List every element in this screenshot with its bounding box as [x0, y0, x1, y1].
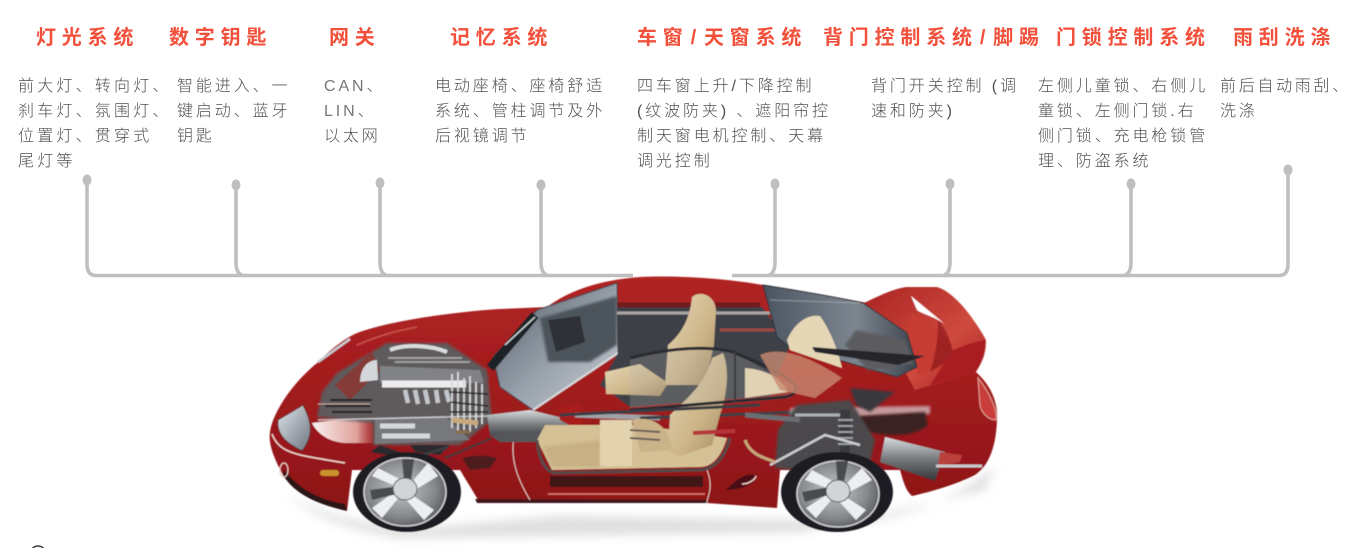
text: lighting details: 尾灯等: [18, 153, 76, 170]
front seats: [630, 294, 735, 456]
text: window details: 调光控制: [637, 153, 713, 170]
engine bay: [317, 343, 497, 470]
text: window details: (纹波防夹) 、遮阳帘控: [637, 103, 831, 120]
text: door lock details: [1038, 77, 1208, 170]
text: door lock details: 童锁、左侧门锁.右: [1038, 103, 1197, 120]
text: lighting details: 前大灯、转向灯、: [18, 78, 172, 95]
heading: tailgate control and kick sensor: 背门控制系统/脚踢: [823, 27, 1045, 49]
bumper highlights and details: [272, 327, 756, 511]
ground shadow: [290, 465, 995, 538]
text: tailgate details: 背门开关控制 (调: [871, 78, 1019, 95]
text: door lock details: 侧门锁、充电枪锁管: [1038, 128, 1208, 145]
connector: right branch lines: [732, 164, 1292, 276]
heading: window and sunroof system: 车窗/天窗系统: [637, 27, 807, 49]
text: tailgate details: 速和防夹): [871, 103, 955, 120]
text: lighting details: 位置灯、贯穿式: [18, 128, 152, 145]
text: wiper details: [1220, 77, 1351, 120]
text: digital key details: 键启动、蓝牙: [177, 103, 290, 120]
side window frame: [560, 348, 797, 415]
rear wheel: [781, 452, 893, 532]
heading: memory system: 记忆系统: [450, 27, 553, 49]
text: digital key details: 钥匙: [177, 128, 215, 145]
car body shell: [270, 276, 997, 511]
text: window details: 四车窗上升/下降控制: [637, 78, 814, 95]
text: lighting details: 刹车灯、氛围灯、: [18, 103, 172, 120]
text: tailgate details: [871, 78, 1019, 120]
rear suspension: [745, 400, 875, 470]
windshield: [490, 283, 618, 410]
text: memory details: 电动座椅、座椅舒适: [435, 78, 605, 95]
text: door lock details: 理、防盗系统: [1038, 153, 1151, 170]
text: gateway details: CAN、: [324, 78, 385, 95]
cabin interior: [600, 305, 790, 407]
heading: digital key: 数字钥匙: [169, 27, 272, 49]
text: wiper details: 前后自动雨刮、: [1220, 78, 1351, 95]
connector: left branch lines: [82, 174, 633, 276]
fuel tank: [858, 412, 928, 435]
headlight: [278, 405, 310, 451]
transmission and drive shaft: [487, 403, 800, 442]
text: lighting details: [18, 77, 172, 170]
muffler and tail pipe: [880, 437, 982, 481]
text: door lock details: 左侧儿童锁、右侧儿: [1038, 78, 1208, 95]
text: gateway details: 以太网: [324, 128, 381, 145]
text: window details: 制天窗电机控制、天幕: [637, 128, 826, 145]
text: gateway details: [324, 78, 385, 145]
heading: gateway: 网关: [329, 27, 381, 49]
text: digital key details: [177, 78, 290, 145]
heading: door lock control system: 门锁控制系统: [1056, 27, 1211, 49]
text: digital key details: 智能进入、一: [177, 78, 290, 95]
text: window details: [637, 78, 831, 170]
text: gateway details: LIN、: [324, 103, 377, 120]
hood highlight: [312, 415, 376, 443]
front wheel: [353, 452, 461, 532]
text: wiper details: 洗涤: [1220, 103, 1257, 120]
text: memory details: 系统、管柱调节及外: [435, 103, 605, 120]
spoiler: [862, 287, 986, 394]
heading: wiper and washer: 雨刮洗涤: [1233, 27, 1336, 49]
illustration: cutaway sports car: [270, 276, 997, 538]
heading: lighting system: 灯光系统: [36, 27, 139, 49]
tail light: [978, 378, 996, 420]
decorative mark at lower edge: [30, 546, 46, 548]
rear body highlight band: [790, 406, 930, 420]
spoiler cutout: [911, 296, 946, 325]
under-hatch components: [850, 388, 895, 412]
rear seat and hatch glass: [760, 285, 925, 398]
door opening and carpet: [537, 420, 730, 494]
text: memory details: [435, 78, 605, 145]
text: memory details: 后视镜调节: [435, 128, 530, 145]
